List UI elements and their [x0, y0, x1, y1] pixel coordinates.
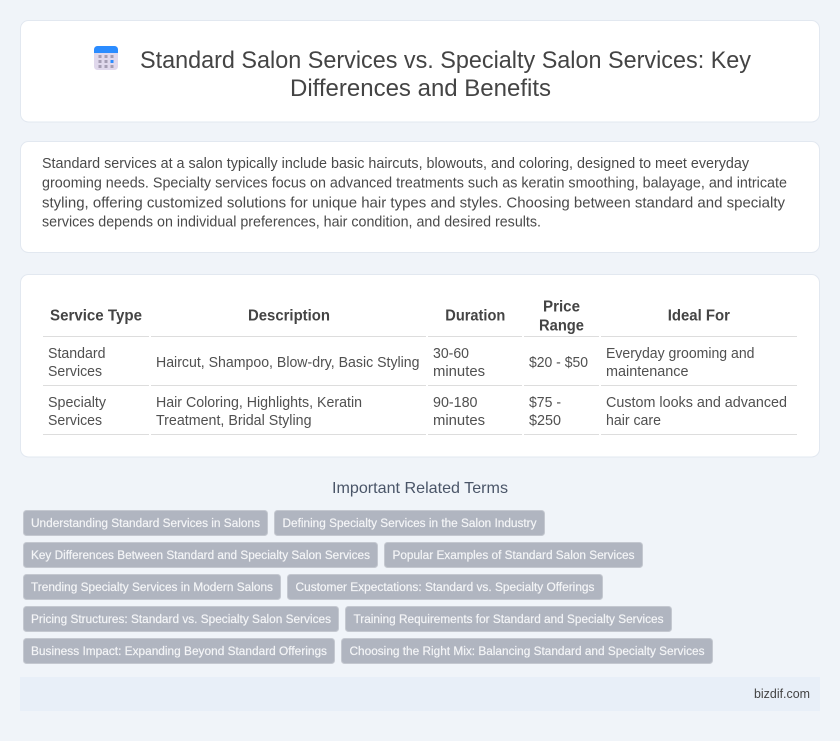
table row: standard services: minutes — [433, 364, 485, 380]
table row: specialty services: Treatment, Bridal Styling — [156, 413, 312, 429]
title: Standard Salon Services vs. Specialty Salon Services: Key — [140, 47, 751, 74]
panel: title header — [20, 20, 820, 122]
table row: specialty services: $250 — [529, 413, 561, 429]
icon: calendar — [94, 46, 118, 70]
panel: comparison table — [20, 274, 820, 457]
table row: specialty services: hair care — [606, 413, 661, 429]
title: Differences and Benefits — [290, 75, 551, 102]
table row: standard services: Everyday grooming and — [606, 346, 754, 362]
table header row: Description — [248, 308, 330, 325]
title — [140, 47, 751, 102]
tag row 4: Training Requirements for Standard and Specialty Services — [354, 612, 664, 626]
table row: specialty services — [43, 395, 797, 435]
tag row 3: Trending Specialty Services in Modern Salons — [31, 580, 273, 594]
footer — [20, 677, 820, 711]
tag row 1 — [24, 510, 544, 536]
tag row 4: Pricing Structures: Standard vs. Specialty Salon Services — [31, 612, 331, 626]
table row: specialty services: Services — [48, 413, 102, 429]
table row: standard services: $20 - $50 — [529, 355, 588, 371]
table row: specialty services: Custom looks and advanced — [606, 395, 787, 411]
table row: standard services — [43, 346, 797, 386]
table header row: Range — [539, 318, 584, 335]
tag row 2 — [24, 542, 642, 568]
heading: important related terms: Important Related Terms — [332, 480, 508, 497]
table header row: Price — [543, 299, 580, 316]
tag row 5: Business Impact: Expanding Beyond Standard Offerings — [31, 644, 327, 658]
tag row 2: Key Differences Between Standard and Specialty Salon Services — [31, 548, 370, 562]
table row: standard services: Haircut, Shampoo, Blow-dry, Basic Styling — [156, 355, 420, 371]
tag row 5 — [24, 638, 712, 664]
table row: specialty services: $75 - — [529, 395, 561, 411]
tag row 1: Understanding Standard Services in Salons — [31, 516, 260, 530]
table row: specialty services: minutes — [433, 413, 485, 429]
intro paragraph: grooming needs. Specialty services focus on advanced treatments such as keratin smoothing, balayage, and intricate — [42, 176, 787, 192]
table row: standard services: 30-60 — [433, 346, 469, 362]
table row: standard services: Services — [48, 364, 102, 380]
table header row: Service Type — [50, 308, 142, 325]
table header row: Ideal For — [668, 308, 730, 325]
intro paragraph: Standard services at a salon typically include basic haircuts, blowouts, and coloring, designed to meet everyday — [42, 156, 750, 172]
panel: introduction text — [20, 142, 820, 252]
related terms tags — [24, 510, 712, 664]
tag row 2: Popular Examples of Standard Salon Services — [392, 548, 634, 562]
intro paragraph: styling, offering customized solutions for unique hair types and styles. Choosing between standard and specialty — [42, 195, 786, 211]
tag row 1: Defining Specialty Services in the Salon Industry — [282, 516, 537, 530]
table header row — [43, 299, 797, 337]
table header row: Duration — [445, 308, 505, 325]
intro paragraph: services depends on individual preferences, hair condition, and desired results. — [42, 215, 541, 231]
table row: specialty services: 90-180 — [433, 395, 478, 411]
table row: specialty services: Specialty — [48, 395, 107, 411]
footer source text: bizdif.com — [754, 686, 810, 701]
tag row 4 — [24, 606, 672, 632]
tag row 3 — [24, 574, 602, 600]
tag row 3: Customer Expectations: Standard vs. Specialty Offerings — [296, 580, 594, 594]
tag row 5: Choosing the Right Mix: Balancing Standard and Specialty Services — [350, 644, 704, 658]
table row: specialty services: Hair Coloring, Highlights, Keratin — [156, 395, 362, 411]
intro paragraph — [42, 156, 787, 231]
table row: standard services: maintenance — [606, 364, 688, 380]
table row: standard services: Standard — [48, 346, 106, 362]
